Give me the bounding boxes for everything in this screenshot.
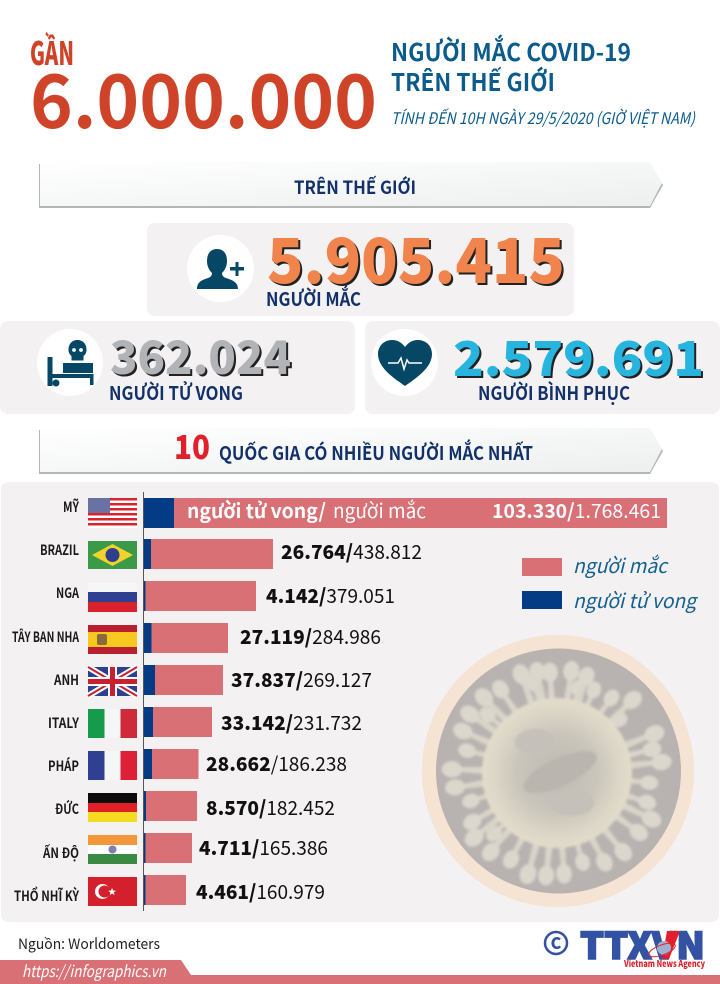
footer strip with url: https://infographics.vn <box>22 958 167 982</box>
row: India: 4.711/165.386 <box>199 832 328 861</box>
ribbon: top 10 heading: 10 <box>174 421 210 469</box>
row: Russia: 4.142/379.051 <box>266 580 395 609</box>
logo: TTXVN: C <box>551 930 562 954</box>
label: cases: NGƯỜI MẮC <box>266 285 361 312</box>
row: UK: 37.837/269.127 <box>231 664 372 693</box>
row: Italy: 33.142/231.732 <box>221 707 362 736</box>
axis <box>142 492 144 911</box>
panel: deaths <box>0 321 355 414</box>
logo: TTXVN: TTXVN <box>580 916 705 970</box>
legend: người tử vong <box>573 585 699 614</box>
row: Turkey <box>14 875 325 906</box>
icon: skull on bed <box>37 329 103 396</box>
row: USA <box>63 495 667 528</box>
legend: người mắc <box>573 550 669 579</box>
row: Italy <box>48 707 362 738</box>
row: Germany: 8.570/182.452 <box>206 792 335 821</box>
row: Brazil <box>40 536 422 569</box>
row: Russia <box>56 580 395 612</box>
panel: recovered <box>365 320 720 414</box>
row: Turkey: 4.461/160.979 <box>196 876 325 905</box>
label: recovered: NGƯỜI BÌNH PHỤC <box>478 379 630 406</box>
number: cases: 5.905.415 <box>267 211 565 301</box>
chart: bars <box>12 492 667 911</box>
row: Brazil: BRAZIL <box>40 540 79 560</box>
ribbon: top 10 heading: QUỐC GIA CÓ NHIỀU NGƯỜI MẮC NHẤT <box>219 439 533 466</box>
row: Turkey: THỔ NHĨ KỲ <box>14 886 80 906</box>
row: France <box>48 748 347 780</box>
ribbon: world heading: TRÊN THẾ GIỚI <box>294 174 416 200</box>
row: Italy: ITALY <box>48 713 80 733</box>
title: subtitle <box>391 33 696 129</box>
row: USA: MỸ <box>63 497 80 517</box>
title: big number: GẦN <box>30 29 74 75</box>
row: Brazil: 26.764/438.812 <box>281 536 422 565</box>
row: India <box>42 832 328 864</box>
row: France: 28.662/186.238 <box>206 748 347 777</box>
ribbon: top 10 heading <box>39 421 663 474</box>
number: recovered: 2.579.691 <box>453 320 704 390</box>
legend <box>522 550 699 614</box>
row: Spain: 27.119/284.986 <box>240 621 381 650</box>
title: subtitle: TRÊN THẾ GIỚI <box>391 63 555 98</box>
row: USA: người mắc <box>333 495 426 524</box>
row: USA: người tử vong/ <box>187 495 326 524</box>
illustration: virus <box>422 635 694 907</box>
row: Spain <box>12 621 381 654</box>
icon: person plus <box>187 235 254 302</box>
source: Nguồn: Worldometers <box>18 933 160 954</box>
row: UK: ANH <box>53 670 79 690</box>
number: deaths: 362.024 <box>110 322 291 388</box>
row: UK <box>53 664 372 696</box>
label: deaths: NGƯỜI TỬ VONG <box>109 379 243 406</box>
row: Spain: TÂY BAN NHA <box>12 627 80 647</box>
panel: country chart background <box>1 482 719 922</box>
icon: heart pulse <box>371 329 438 396</box>
row: France: PHÁP <box>48 756 79 776</box>
title: subtitle: NGƯỜI MẮC COVID-19 <box>391 33 631 68</box>
row: India: ẤN ĐỘ <box>42 842 79 863</box>
row: Germany <box>55 791 335 822</box>
footer strip with url <box>0 958 720 984</box>
panel: confirmed cases <box>147 211 574 316</box>
row: Russia: NGA <box>56 583 80 603</box>
row: USA: 103.330/1.768.461 <box>492 495 661 524</box>
ribbon: world heading <box>39 162 663 208</box>
row: Germany: ĐỨC <box>55 799 79 819</box>
title: big number: 6.000.000 <box>30 43 377 150</box>
